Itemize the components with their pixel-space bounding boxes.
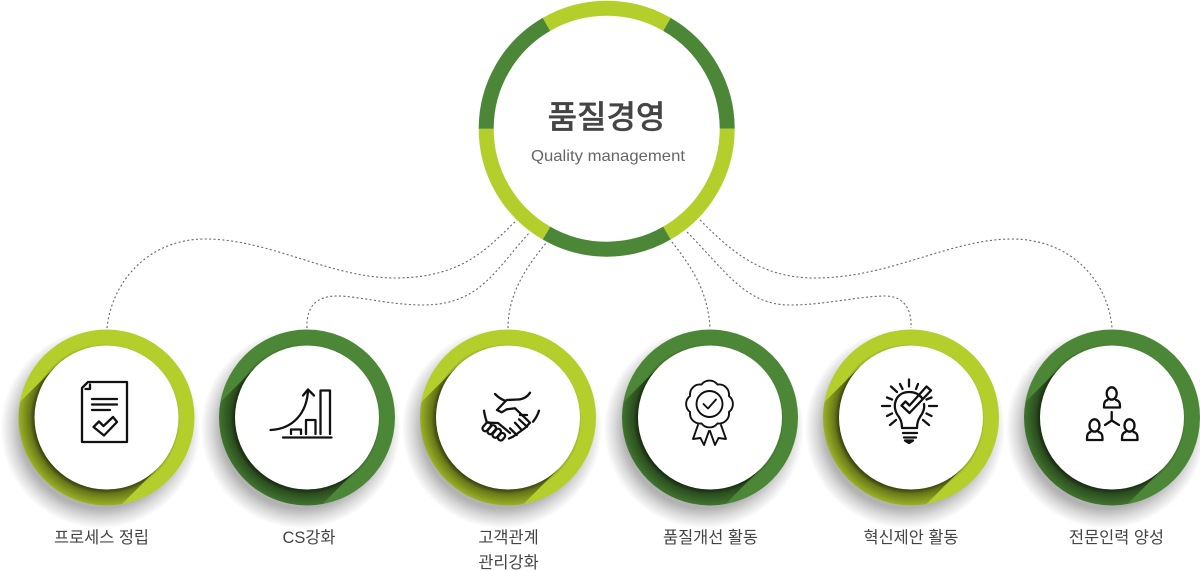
label: 품질개선 활동 bbox=[663, 529, 758, 547]
label: 혁신제안 활동 bbox=[863, 529, 959, 547]
icon: rosette with check bbox=[686, 381, 733, 445]
heading: 품질경영 bbox=[548, 99, 665, 135]
label: 프로세스 정립 bbox=[54, 529, 149, 547]
central circle: quality management bbox=[486, 8, 727, 249]
segmented ring bbox=[486, 8, 727, 249]
icon: handshake bbox=[481, 393, 539, 442]
badge bbox=[1008, 330, 1200, 526]
icon: document with check bbox=[82, 382, 127, 442]
icon: connected people bbox=[1087, 387, 1138, 440]
connector lines bbox=[107, 220, 1112, 328]
item 2: CS bbox=[204, 330, 398, 544]
item 4: quality improvement bbox=[606, 330, 802, 544]
label: CS강화 bbox=[283, 529, 335, 547]
badge bbox=[204, 330, 398, 526]
item 1: process bbox=[3, 330, 198, 544]
item 3: customer relations bbox=[404, 330, 600, 570]
label: 고객관계 bbox=[478, 529, 539, 547]
icon: light bulb with check bbox=[882, 380, 937, 443]
badge bbox=[808, 330, 1002, 526]
icon: growth chart bbox=[270, 390, 332, 438]
badge bbox=[606, 330, 802, 526]
item 5: innovation proposals bbox=[808, 330, 1002, 544]
subheading: Quality management bbox=[531, 148, 686, 165]
badge bbox=[3, 330, 198, 526]
label: 전문인력 양성 bbox=[1069, 529, 1164, 547]
label bbox=[478, 529, 539, 571]
badge bbox=[404, 330, 600, 526]
item 6: talent development bbox=[1008, 330, 1200, 545]
